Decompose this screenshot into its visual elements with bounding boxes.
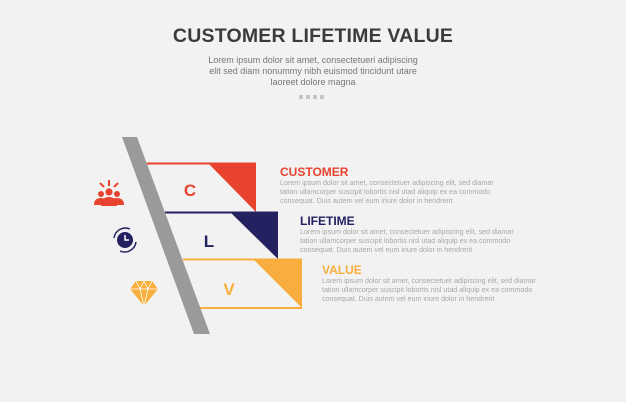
heading: customer: CUSTOMER [280, 165, 348, 179]
text: lifetime: Lorem ipsum dolor sit amet, consectetuer adipiscing elit, sed diamar [300, 228, 514, 236]
gray slanted bar [122, 137, 210, 334]
heading: lifetime: LIFETIME [300, 214, 355, 228]
text: customer [280, 179, 494, 205]
icon: clock [114, 228, 136, 252]
subtitle: Lorem ipsum dolor sit amet, consectetueri adipiscing [208, 55, 418, 65]
text: value [322, 277, 536, 303]
text: lifetime: tation ullamcorper suscipit lobortis nisl utad aliquip ex ea commodo [300, 237, 510, 245]
text: lifetime: consequat. Duis autem vel eum iriure dolor in hendrerit [300, 246, 472, 254]
panel: L [165, 212, 278, 259]
panel: L: L [204, 232, 214, 251]
panel: V [183, 259, 302, 308]
panel: V: V [223, 280, 235, 299]
panel: C [147, 163, 256, 212]
icon: people [94, 180, 124, 206]
subtitle [208, 55, 418, 87]
text: customer: tation ullamcorper suscipit lobortis nisl utad aliquip ex ea commodo [280, 188, 490, 196]
icon: diamond [130, 281, 158, 306]
panel: C: C [184, 181, 196, 200]
heading: value: VALUE [322, 263, 362, 277]
text: value: consequat. Duis autem vel eum iriure dolor in hendrerit [322, 295, 494, 303]
title: CUSTOMER LIFETIME VALUE [173, 25, 453, 47]
subtitle: elit sed diam nonummy nibh euismod tincidunt utare [209, 66, 417, 76]
text: customer: consequat. Duis autem vel eum iriure dolor in hendrerit [280, 197, 452, 205]
text: value: Lorem ipsum dolor sit amet, consectetuer adipiscing elit, sed diamar [322, 277, 536, 285]
subtitle: laoreet dolore magna [270, 77, 356, 87]
dots [299, 95, 327, 99]
text: customer: Lorem ipsum dolor sit amet, consectetuer adipiscing elit, sed diamar [280, 179, 494, 187]
text: value: tation ullamcorper suscipit lobortis nisl utad aliquip ex ea commodo [322, 286, 532, 294]
text: lifetime [300, 228, 514, 254]
